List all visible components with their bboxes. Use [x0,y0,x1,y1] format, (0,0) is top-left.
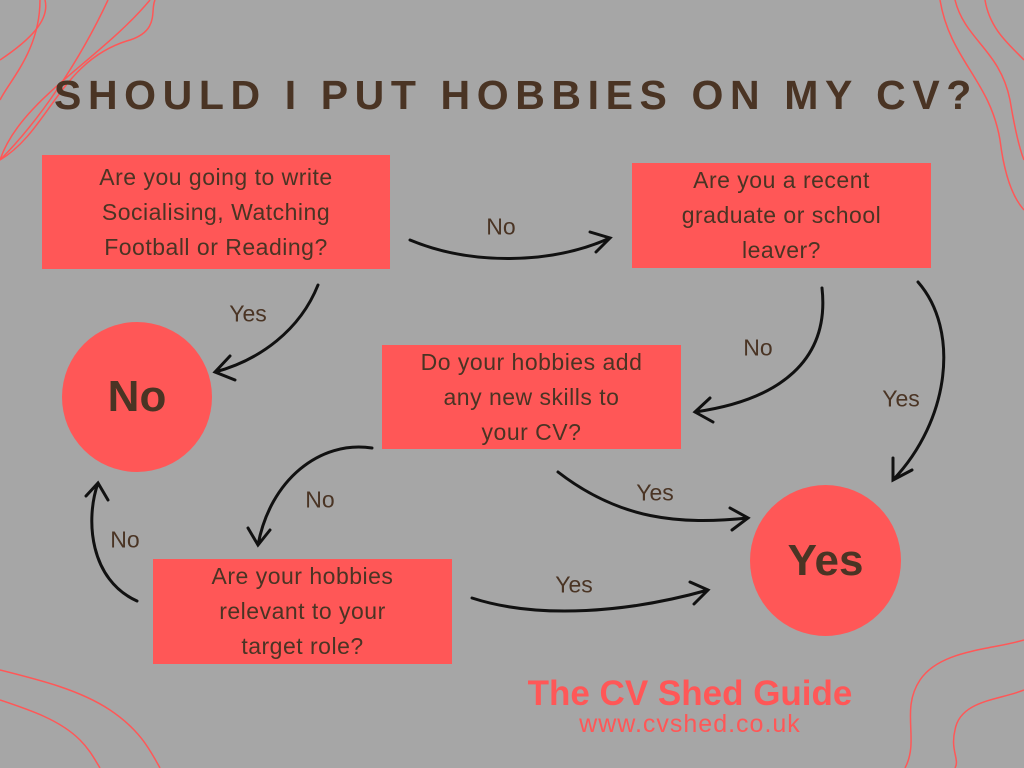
text: No [486,214,516,240]
box: relevant hobbies question: relevant to your [219,598,386,624]
footer: url: www.cvshed.co.uk [579,710,801,738]
text: Yes [882,386,920,412]
box: new skills question: Do your hobbies add [421,348,642,374]
footer: guide name: The CV Shed Guide [528,674,852,713]
box: socialising question: Socialising, Watching [102,198,330,224]
box: socialising question [42,155,390,269]
box: new skills question: your CV? [482,418,581,444]
box: relevant hobbies question [153,559,452,664]
circle: No: No [108,372,166,421]
box: recent graduate question: graduate or school [682,202,881,228]
box: recent graduate question: Are you a recent [693,167,870,193]
box: new skills question [382,345,681,449]
text: Yes [555,572,593,598]
box: relevant hobbies question: target role? [241,633,364,659]
text: No [743,334,773,360]
text: Yes [229,300,267,326]
box: new skills question: any new skills to [444,384,619,410]
text: Yes [636,480,674,506]
text: No [305,486,335,512]
circle: No [62,322,212,472]
box: relevant hobbies question: Are your hobbies [212,563,393,589]
box: recent graduate question: leaver? [742,237,821,263]
box: socialising question: Football or Reading? [104,234,328,260]
circle: Yes [750,485,901,636]
text: No [110,526,140,552]
arrow labels [110,214,920,598]
box: recent graduate question [632,163,931,268]
box: socialising question: Are you going to write [99,164,333,190]
circle: Yes: Yes [788,536,863,584]
title: SHOULD I PUT HOBBIES ON MY CV? [54,72,978,118]
